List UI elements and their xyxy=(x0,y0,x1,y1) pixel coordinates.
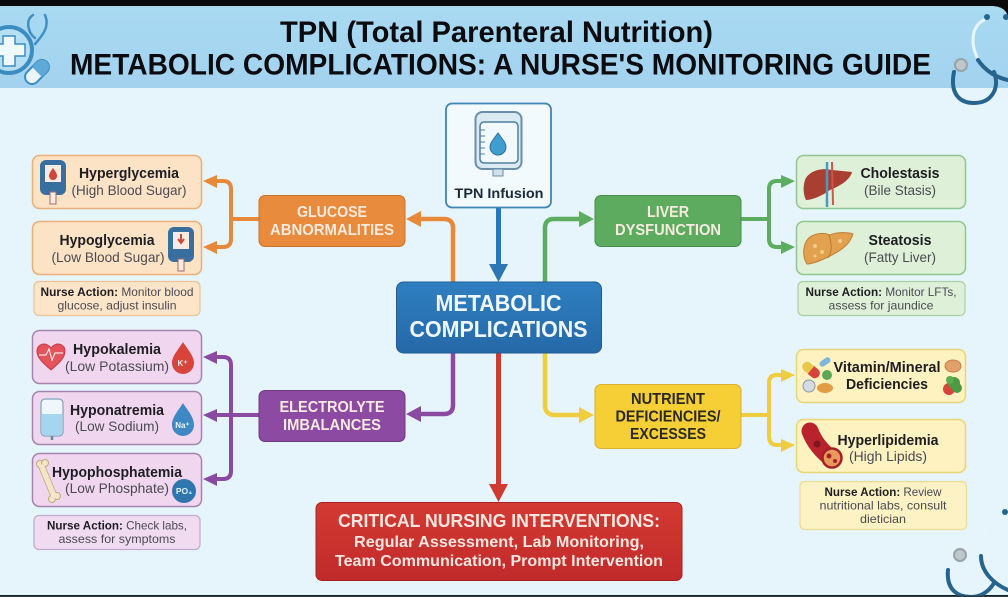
icon: potassium drop xyxy=(172,342,194,374)
arrow: center to nutrient xyxy=(545,353,594,423)
callout: liver nurse action xyxy=(798,282,965,316)
panel: liver dysfunction: LIVER xyxy=(647,204,689,221)
panel: glucose abnormalities: ABNORMALITIES xyxy=(270,222,394,239)
icon: glucose meter xyxy=(40,160,66,204)
callout: electrolyte nurse action: Nurse Action: Check labs, xyxy=(47,518,187,532)
callout: glucose nurse action: glucose, adjust insulin xyxy=(58,298,176,312)
panel: metabolic complications xyxy=(396,282,602,353)
icon: pills xyxy=(800,356,833,393)
panel: nutrient deficiencies xyxy=(595,384,741,448)
panel: glucose abnormalities xyxy=(259,196,405,246)
panel: critical nursing interventions xyxy=(316,502,682,580)
panel: liver dysfunction: DYSFUNCTION xyxy=(615,222,721,239)
bottom edge xyxy=(0,596,1008,597)
panel: liver dysfunction xyxy=(595,196,741,246)
icon: potassium drop: K⁺ xyxy=(178,359,188,368)
icon: phosphate circle xyxy=(172,479,196,503)
arrow: center to electrolyte imbalances xyxy=(406,353,453,422)
panel: vitamin mineral deficiencies: Vitamin/Mineral xyxy=(834,360,940,376)
panel: hypokalemia: Hypokalemia xyxy=(73,342,162,358)
panel: hyponatremia xyxy=(32,392,202,444)
arrow: nutrient to sub-items xyxy=(741,369,795,452)
panel: electrolyte imbalances xyxy=(259,390,405,442)
panel: hyperglycemia xyxy=(32,156,202,208)
callout: nutrient nurse action xyxy=(800,482,966,530)
arrow: liver to sub-items xyxy=(741,175,795,254)
icon: liver with bile duct xyxy=(804,162,852,207)
icon: TPN bag xyxy=(476,112,522,176)
icon: artery with plaque xyxy=(810,431,842,468)
panel: nutrient deficiencies: DEFICIENCIES/ xyxy=(616,408,721,426)
title xyxy=(70,16,931,82)
icon: IV bag xyxy=(41,399,63,440)
panel: hypophosphatemia xyxy=(32,454,202,506)
panel: vitamin mineral deficiencies xyxy=(796,350,966,402)
title: METABOLIC COMPLICATIONS: A NURSE'S MONITORING GUIDE xyxy=(70,48,931,82)
header band xyxy=(0,6,1008,88)
icon: glucose meter xyxy=(168,227,194,271)
panel: nutrient deficiencies: NUTRIENT xyxy=(631,391,705,408)
callout: nutrient nurse action: nutritional labs, consult xyxy=(820,498,947,512)
connectors xyxy=(203,175,795,502)
callout: electrolyte nurse action: assess for symptoms xyxy=(58,532,176,546)
panel: critical nursing interventions: Team Communication, Prompt Intervention xyxy=(335,553,663,570)
icon: fatty liver xyxy=(804,233,853,264)
icon: sodium drop: Na⁺ xyxy=(175,421,190,430)
panel: hypophosphatemia: Hypophosphatemia xyxy=(52,465,183,481)
arrow: glucose to sub-items xyxy=(203,175,259,254)
panel: metabolic complications: COMPLICATIONS xyxy=(410,316,588,342)
panel: hypoglycemia xyxy=(32,222,202,274)
callout: glucose nurse action xyxy=(34,282,200,316)
panel: cholestasis: (Bile Stasis) xyxy=(864,182,936,198)
panel: steatosis: Steatosis xyxy=(868,233,932,249)
panel: glucose abnormalities: GLUCOSE xyxy=(297,204,367,221)
arrow: center to critical interventions xyxy=(489,353,508,502)
arrow: TPN infusion to metabolic complications xyxy=(489,208,508,282)
panel: TPN infusion: TPN Infusion xyxy=(454,185,544,201)
panel: hypophosphatemia: (Low Phosphate) xyxy=(65,480,169,496)
arrow: electrolyte to sub-items xyxy=(203,351,259,486)
arrow: center to glucose abnormalities xyxy=(406,211,453,282)
callout: liver nurse action: Nurse Action: Monitor LFTs, xyxy=(806,285,956,299)
icon: phosphate circle: PO₄ xyxy=(176,486,192,496)
callout: nutrient nurse action: dietician xyxy=(860,512,906,526)
icon: sodium drop xyxy=(172,403,194,436)
panel: steatosis: (Fatty Liver) xyxy=(864,249,936,265)
icon: bone xyxy=(36,460,60,502)
panel: nutrient deficiencies: EXCESSES xyxy=(630,426,706,443)
panel: hyperlipidemia: Hyperlipidemia xyxy=(838,433,939,449)
panel: hyperglycemia: Hyperglycemia xyxy=(79,166,180,182)
arrow: center to liver dysfunction xyxy=(545,211,594,282)
callout: electrolyte nurse action xyxy=(34,516,200,550)
panel: electrolyte imbalances: ELECTROLYTE xyxy=(280,399,384,416)
icon: stethoscope top right xyxy=(953,14,1008,103)
icon: heart with pulse xyxy=(37,344,65,370)
icon: fruit and vegetables xyxy=(943,360,962,395)
panel: hypoglycemia: Hypoglycemia xyxy=(60,233,155,249)
panel: steatosis xyxy=(796,222,966,274)
title: TPN (Total Parenteral Nutrition) xyxy=(280,16,713,49)
panel: TPN infusion xyxy=(446,104,551,208)
panel: cholestasis xyxy=(796,156,966,208)
panel: hyponatremia: (Low Sodium) xyxy=(75,418,159,434)
panel: critical nursing interventions: CRITICAL NURSING INTERVENTIONS: xyxy=(338,511,660,531)
callout: nutrient nurse action: Nurse Action: Review xyxy=(824,485,942,499)
callout: glucose nurse action: Nurse Action: Monitor blood xyxy=(40,285,193,299)
panel: hyperglycemia: (High Blood Sugar) xyxy=(72,182,186,198)
panel: cholestasis: Cholestasis xyxy=(860,166,940,182)
panel: hyperlipidemia: (High Lipids) xyxy=(849,448,927,464)
panel: critical nursing interventions: Regular Assessment, Lab Monitoring, xyxy=(354,534,644,551)
panel: hypoglycemia: (Low Blood Sugar) xyxy=(52,249,164,265)
panel: hyperlipidemia xyxy=(796,420,966,472)
panel: metabolic complications: METABOLIC xyxy=(436,290,562,316)
icon: medical cross with stethoscope and pill xyxy=(0,15,52,87)
panel: electrolyte imbalances: IMBALANCES xyxy=(283,417,381,434)
panel: hypokalemia xyxy=(32,330,202,384)
panel: hyponatremia: Hyponatremia xyxy=(70,403,165,419)
panel: hypokalemia: (Low Potassium) xyxy=(65,358,169,374)
callout: liver nurse action: assess for jaundice xyxy=(828,298,934,312)
icon: stethoscope bottom right xyxy=(948,509,1008,597)
panel: vitamin mineral deficiencies: Deficiencies xyxy=(846,377,928,393)
